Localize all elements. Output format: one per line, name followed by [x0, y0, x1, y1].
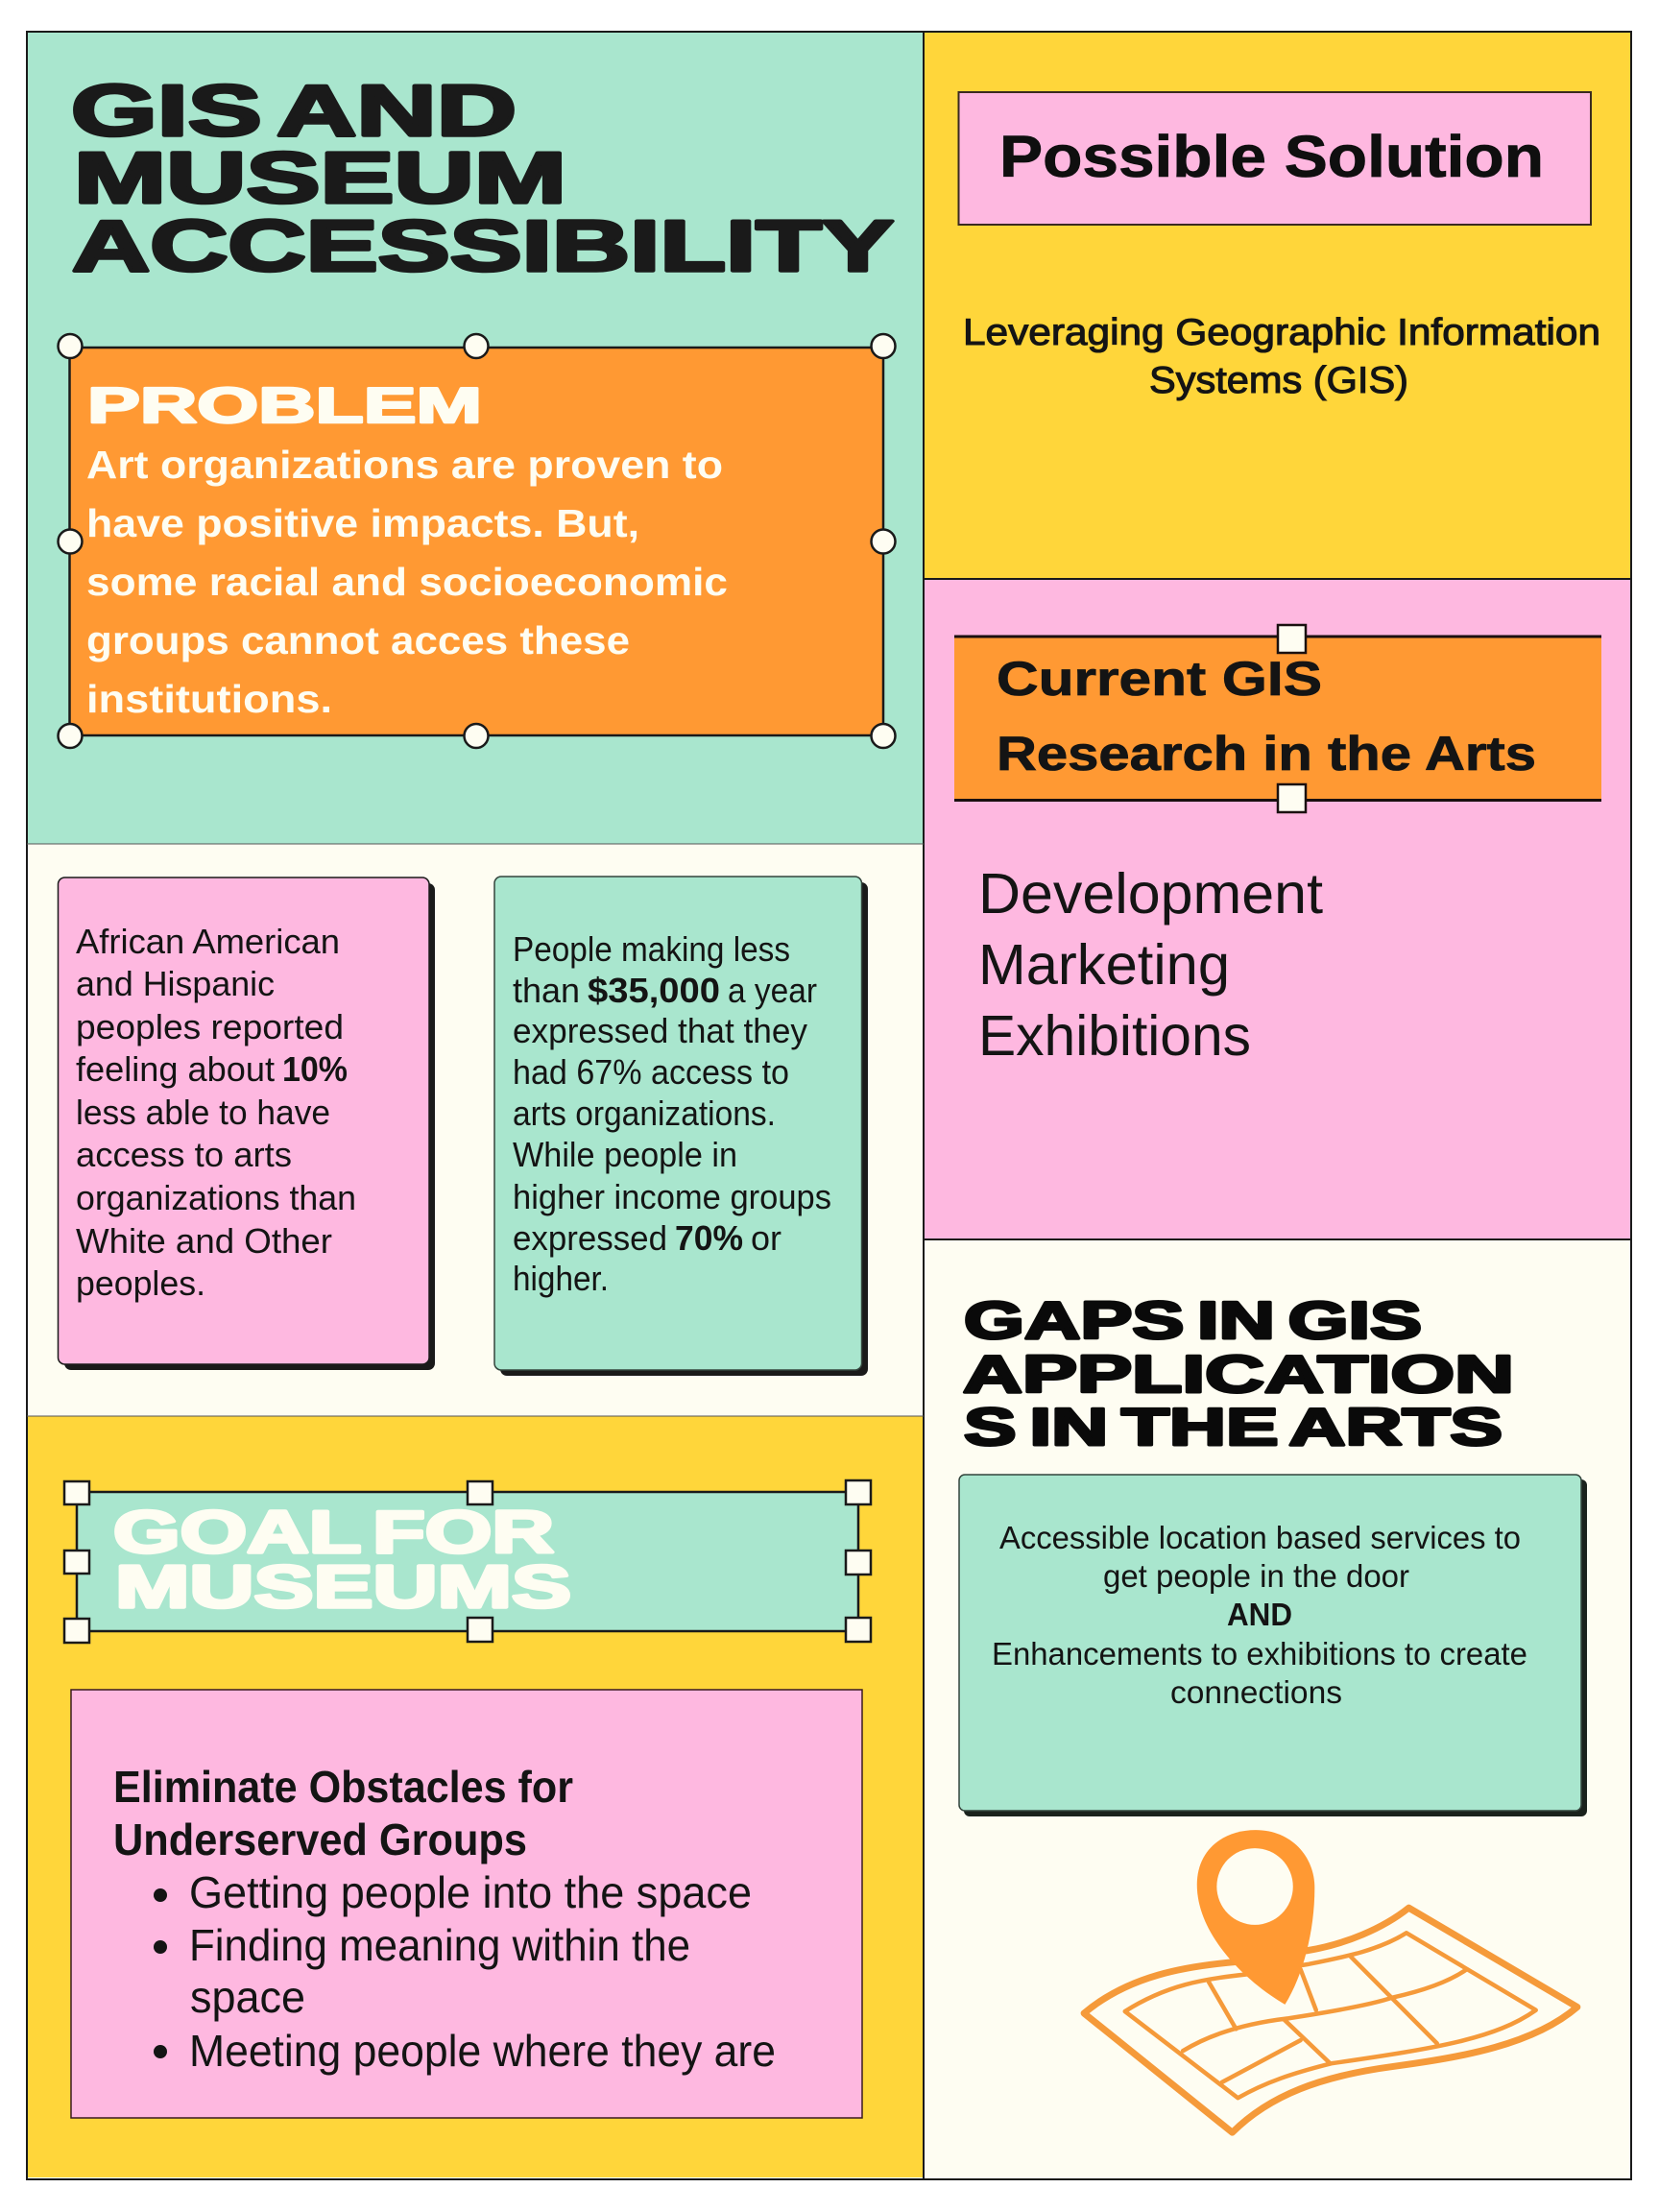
card: income statistic: 70% — [675, 1218, 743, 1258]
gaps text box: get people in the door — [1103, 1558, 1409, 1594]
solution text: Systems (GIS) — [1149, 360, 1408, 401]
problem text: groups cannot acces these — [86, 618, 630, 662]
problem text — [86, 443, 728, 721]
goal heading — [113, 1500, 571, 1621]
card: race statistic: and Hispanic — [76, 964, 275, 1003]
card: race statistic: peoples. — [76, 1263, 205, 1303]
panel: current GIS research — [924, 579, 1631, 1239]
gaps text box — [959, 1475, 1587, 1816]
gaps heading — [963, 1290, 1514, 1456]
goal list box: space — [190, 1972, 305, 2022]
gaps heading: GAPS IN GIS — [964, 1290, 1422, 1350]
gaps heading: APPLICATION — [963, 1344, 1514, 1404]
icon: map with location pin — [1084, 1830, 1577, 2132]
panel: statistics — [27, 844, 924, 1416]
gaps text box: AND — [1227, 1597, 1292, 1632]
title: ACCESSIBILITY — [72, 205, 894, 286]
selection handles — [1278, 625, 1306, 812]
card: race statistic: access to arts — [76, 1135, 292, 1174]
panel: possible solution — [924, 32, 1631, 579]
card: income statistic: had 67% access to — [513, 1052, 789, 1092]
research topics — [978, 862, 1323, 1068]
card: race statistic: White and Other — [76, 1221, 332, 1261]
title — [71, 70, 894, 286]
solution text — [963, 312, 1600, 401]
card: race statistic: 10% — [282, 1049, 348, 1089]
selection handles — [64, 1480, 871, 1643]
card: income statistic: a year — [728, 971, 817, 1010]
possible solution heading — [958, 92, 1591, 225]
research heading band — [954, 625, 1601, 812]
card: income statistic: While people in — [513, 1135, 737, 1174]
goal list box: Eliminate Obstacles for — [113, 1762, 573, 1812]
goal list box: Underserved Groups — [113, 1815, 527, 1864]
card: income statistic: expressed — [513, 1218, 667, 1258]
research heading band: Research in the Arts — [997, 727, 1536, 781]
gaps heading: S IN THE ARTS — [964, 1397, 1503, 1456]
possible solution heading: Possible Solution — [999, 124, 1544, 189]
card: race statistic: less able to have — [76, 1093, 330, 1132]
card: income statistic: higher. — [513, 1259, 609, 1298]
card: race statistic: peoples reported — [76, 1007, 344, 1046]
selection handles — [58, 334, 895, 748]
card: income statistic: expressed that they — [513, 1011, 807, 1050]
panel: title and problem — [27, 32, 924, 844]
card: race statistic: feeling about — [76, 1049, 275, 1089]
title: MUSEUM — [74, 137, 566, 218]
goal heading: GOAL FOR — [113, 1500, 554, 1566]
panel: goal for museums — [27, 1416, 924, 2177]
gaps text box: Enhancements to exhibitions to create — [992, 1636, 1527, 1671]
solution text: Leveraging Geographic Information — [963, 312, 1600, 353]
goal heading: MUSEUMS — [115, 1554, 571, 1621]
card: race statistic: African American — [76, 922, 340, 961]
problem box — [58, 334, 895, 748]
card: income statistic: arts organizations. — [513, 1094, 776, 1133]
research topics: Marketing — [978, 933, 1230, 997]
research topics: Development — [978, 862, 1323, 926]
card: income statistic: higher income groups — [513, 1177, 831, 1216]
goal heading box — [64, 1480, 871, 1643]
card: race statistic — [58, 878, 435, 1370]
goal list box: Finding meaning within the — [189, 1920, 690, 1970]
gaps text box: connections — [1170, 1674, 1342, 1710]
problem text: Art organizations are proven to — [86, 443, 723, 487]
research topics: Exhibitions — [978, 1004, 1251, 1068]
goal list box — [71, 1690, 862, 2118]
card: income statistic: than — [513, 971, 580, 1010]
problem heading: PROBLEM — [87, 378, 482, 434]
card: race statistic: organizations than — [76, 1178, 356, 1217]
card: income statistic: People making less — [513, 929, 790, 969]
card: income statistic — [494, 877, 868, 1376]
gaps text box: Accessible location based services to — [999, 1520, 1521, 1555]
panel: gaps in GIS — [924, 1239, 1631, 2180]
problem text: have positive impacts. But, — [86, 501, 639, 545]
research heading band: Current GIS — [997, 652, 1322, 706]
problem text: some racial and socioeconomic — [86, 560, 728, 604]
card: income statistic: or — [751, 1218, 781, 1258]
goal list box: Meeting people where they are — [189, 2026, 776, 2076]
card: income statistic: $35,000 — [588, 971, 720, 1010]
problem text: institutions. — [86, 677, 332, 721]
goal list box: Getting people into the space — [189, 1867, 752, 1917]
title: GIS AND — [71, 70, 517, 151]
